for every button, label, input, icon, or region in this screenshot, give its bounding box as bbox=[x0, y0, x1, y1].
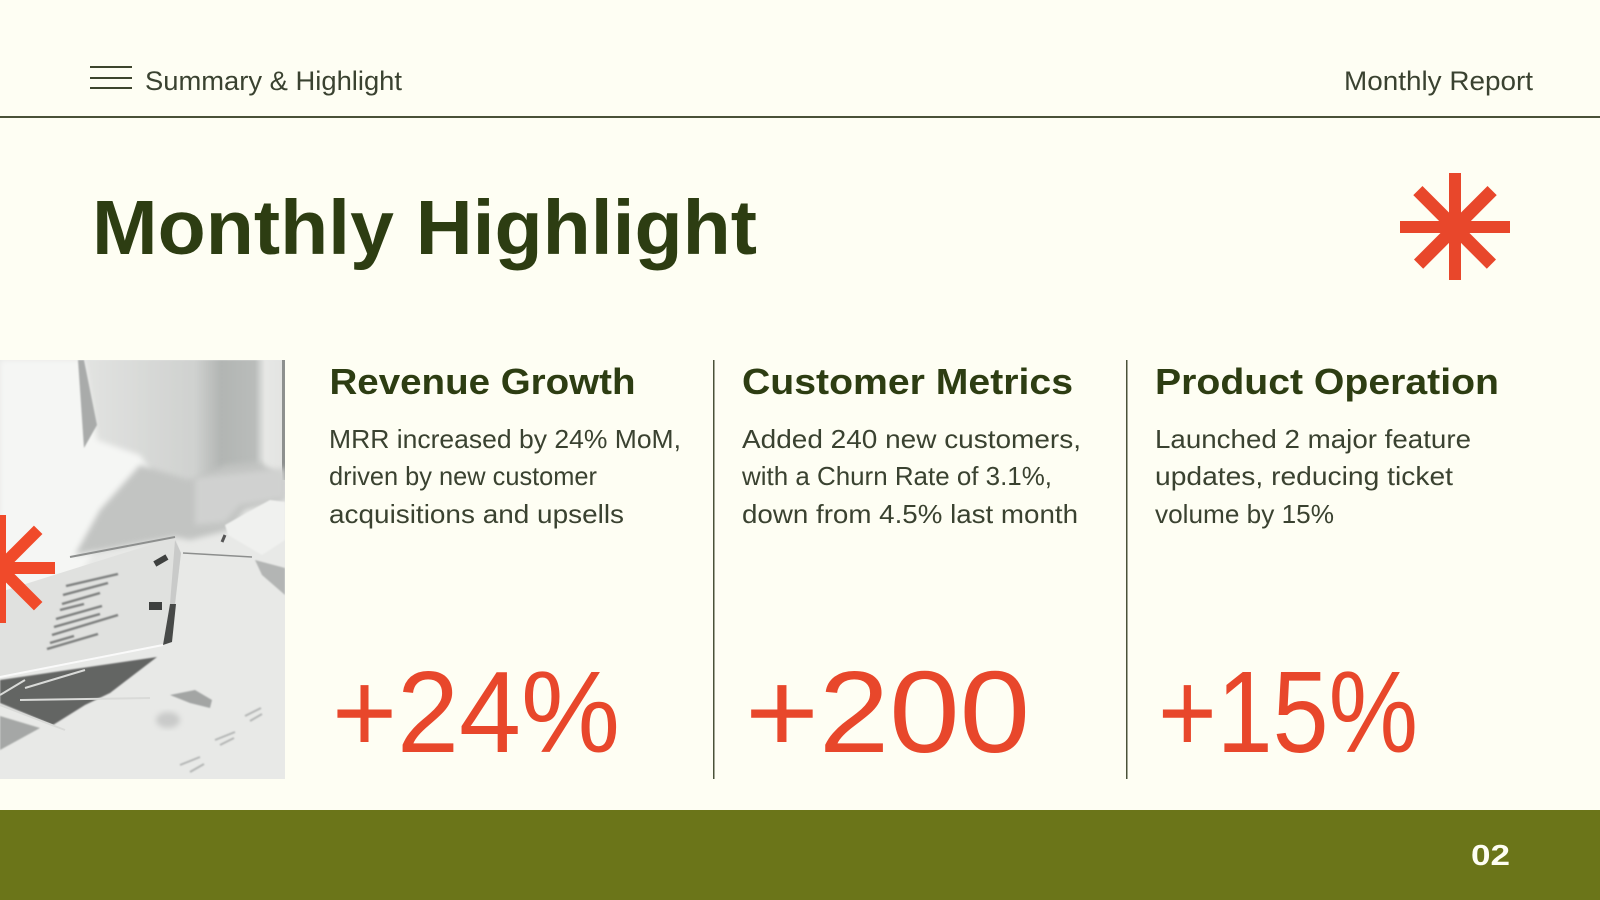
description: Launched 2 major feature bbox=[1155, 424, 1471, 454]
photo: hands and clipboard bbox=[0, 360, 285, 779]
heading: Customer Metrics bbox=[742, 361, 1073, 402]
header rule bbox=[0, 116, 1600, 118]
divider bbox=[713, 360, 714, 779]
description: Added 240 new customers, bbox=[742, 424, 1081, 454]
description bbox=[741, 424, 1081, 529]
description: down from 4.5% last month bbox=[742, 499, 1078, 529]
icon: menu bbox=[90, 67, 132, 88]
description: volume by 15% bbox=[1155, 499, 1334, 529]
panel: customer metrics bbox=[741, 361, 1081, 777]
stat: +24% bbox=[332, 647, 620, 777]
description bbox=[1155, 424, 1471, 529]
document lines bbox=[47, 574, 118, 649]
stat: +15% bbox=[1158, 647, 1418, 777]
title: Monthly Highlight bbox=[92, 185, 757, 271]
description: with a Churn Rate of 3.1%, bbox=[741, 461, 1052, 491]
dark sheets below clipboard bbox=[0, 657, 157, 725]
report label: Monthly Report bbox=[1344, 66, 1534, 96]
panel: product operation bbox=[1155, 361, 1499, 777]
divider bbox=[1126, 360, 1128, 779]
stat: +200 bbox=[745, 647, 1030, 777]
description bbox=[329, 424, 681, 529]
description: acquisitions and upsells bbox=[329, 499, 624, 529]
icon: asterisk bbox=[1400, 173, 1510, 280]
header bbox=[0, 66, 1600, 118]
heading: Revenue Growth bbox=[330, 361, 636, 402]
description: MRR increased by 24% MoM, bbox=[329, 424, 681, 454]
page number: 02 bbox=[1471, 840, 1510, 872]
icon: red asterisk on photo bbox=[0, 515, 55, 623]
section label: Summary & Highlight bbox=[145, 66, 402, 96]
panel: revenue growth bbox=[329, 361, 681, 777]
heading: Product Operation bbox=[1155, 361, 1499, 402]
clipboard bbox=[6, 563, 93, 614]
description: updates, reducing ticket bbox=[1155, 461, 1454, 491]
description: driven by new customer bbox=[329, 461, 597, 491]
footer bar bbox=[0, 810, 1600, 900]
